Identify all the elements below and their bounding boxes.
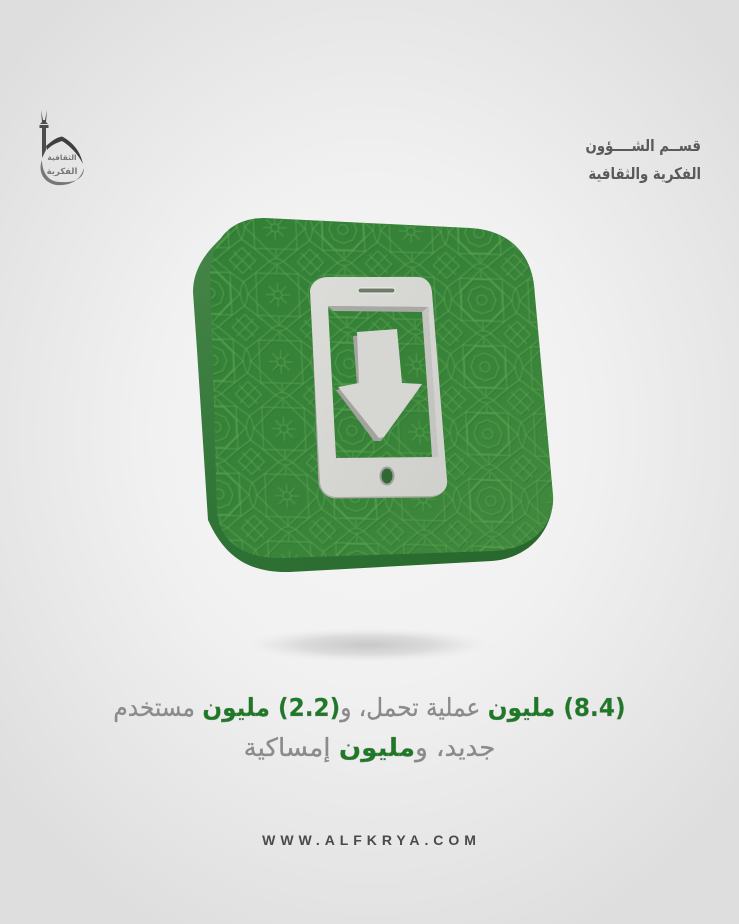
department line 1: قســم الشــــؤون (586, 136, 701, 155)
heading: department name (586, 136, 701, 183)
main statement (113, 693, 626, 762)
logo calligraphy: الثقافية (47, 153, 77, 162)
logo: minaret and dome emblem (40, 110, 84, 185)
home button (380, 468, 394, 484)
logo: minaret and dome emblem: الفكرية (47, 167, 77, 177)
download arrow (336, 329, 422, 441)
statement line 1: (8.4) مليون عملية تحمل، و(2.2) مليون مستخدم (113, 693, 626, 722)
statement line 2: جديد، ومليون إمساكية (244, 732, 495, 762)
illustration: green app tile with phone download icon (40, 110, 554, 658)
floor shadow (243, 628, 493, 662)
tile side (193, 222, 553, 572)
department line 2: الفكرية والثقافية (588, 164, 701, 183)
phone icon (310, 277, 447, 498)
tile face (210, 218, 554, 558)
website url: WWW.ALFKRYA.COM (262, 832, 481, 848)
speaker slot (358, 288, 395, 293)
